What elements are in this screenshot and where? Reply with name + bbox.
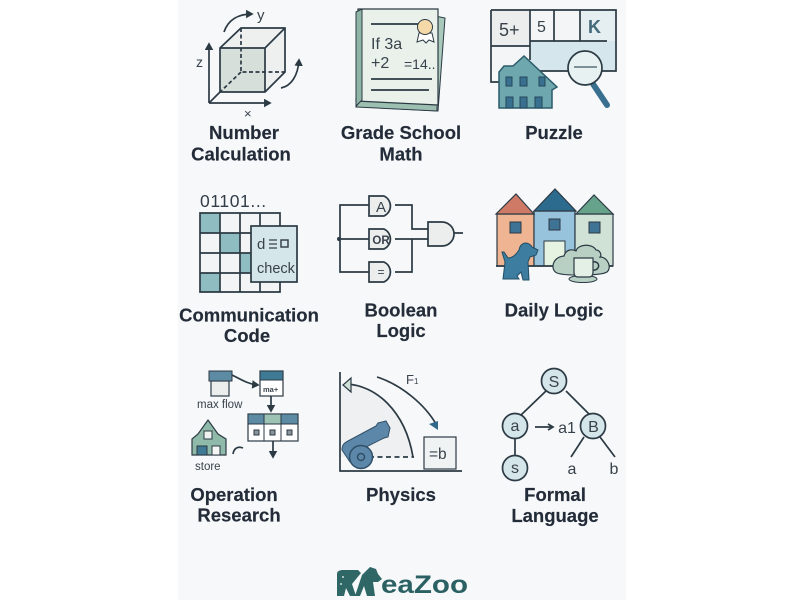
heading: number calculation: Calculation <box>191 144 291 164</box>
icon: 3D cube with axes: y <box>257 7 265 24</box>
heading: operation research: Operation <box>190 484 278 505</box>
icon: code grid with check card: check <box>257 261 296 277</box>
icon: houses, dog and cup <box>496 189 613 282</box>
icon: parse tree: b <box>610 461 619 478</box>
icon: puzzle grid with house and magnifier: 5+ <box>499 20 520 40</box>
icon: cannon trajectory <box>340 372 462 471</box>
icon: parse tree: a <box>511 418 520 435</box>
panel: number calculation <box>191 7 299 164</box>
icon: dog <box>502 243 538 280</box>
icon: operations flow diagram: max flow <box>197 399 243 411</box>
heading: operation research: Research <box>197 504 281 526</box>
icon: 3D cube with axes <box>196 7 299 121</box>
panel: operation research <box>190 371 298 526</box>
icon: puzzle grid with house and magnifier: 5 <box>537 19 546 36</box>
heading: physics: Physics <box>366 484 436 505</box>
heading: grade school math: Grade School <box>341 122 461 143</box>
icon: parse tree: a <box>568 461 577 478</box>
icon: operations flow diagram: ma+ <box>263 385 279 394</box>
icon: parse tree: B <box>588 419 599 436</box>
icon: parse tree: s <box>511 460 519 477</box>
icon: operations flow diagram: store <box>195 461 221 473</box>
panel: grade school math <box>341 9 461 164</box>
icon: store barn <box>192 420 226 455</box>
icon: logic gates circuit: = <box>377 265 385 279</box>
icon: math workbook: If 3a <box>371 36 402 53</box>
icon: 3D cube with axes: z <box>196 54 203 70</box>
heading: boolean logic: Logic <box>376 320 426 341</box>
icon: 3D cube with axes: × <box>244 106 252 121</box>
heading: boolean logic: Boolean <box>365 300 437 320</box>
icon: cannon trajectory: F1 <box>406 372 419 387</box>
icon: code grid with check card: 01101... <box>200 191 267 211</box>
heading: daily logic: Daily Logic <box>505 300 603 320</box>
heading: communication code: Code <box>224 325 270 346</box>
icon: math workbook: +2 <box>371 55 389 72</box>
icon: bear logo <box>337 567 382 596</box>
heading: number calculation: Number <box>209 122 279 143</box>
icon: operations flow diagram <box>192 371 298 473</box>
icon: bush and coffee cup <box>553 245 609 282</box>
heading: formal language: Formal <box>524 484 586 505</box>
icon: logic gates circuit: OR <box>372 235 390 247</box>
icon: logic gates circuit <box>337 196 463 282</box>
icon: cannon trajectory: =b <box>429 446 447 463</box>
heading: communication code: Communication <box>179 304 319 326</box>
icon: award ribbon <box>417 20 434 43</box>
icon: code grid with check card: d <box>257 236 265 253</box>
panel: physics <box>340 372 462 505</box>
icon: magnifying glass <box>568 51 607 105</box>
icon: parse tree: a1 <box>558 420 576 437</box>
panel: boolean logic <box>337 196 463 341</box>
icon: house <box>499 56 557 108</box>
icon: logic gates circuit: A <box>376 199 386 216</box>
heading: grade school math: Math <box>379 144 423 164</box>
logo <box>337 567 468 599</box>
heading: puzzle: Puzzle <box>525 122 583 143</box>
background panel <box>178 0 626 600</box>
icon: math workbook: =14.. <box>404 56 436 72</box>
icon: parse tree: S <box>549 374 559 391</box>
icon: parse tree <box>502 368 619 480</box>
panel: puzzle <box>491 10 616 143</box>
icon: code grid with check card <box>200 191 297 292</box>
panel: formal language <box>502 368 619 526</box>
heading: formal language: Language <box>511 505 599 526</box>
wordmark: eaZoo <box>381 571 468 599</box>
icon: puzzle grid with house and magnifier <box>491 10 616 108</box>
panel: daily logic <box>496 189 613 320</box>
icon: math workbook <box>356 9 445 111</box>
panel: communication code <box>179 191 319 346</box>
icon: puzzle grid with house and magnifier: K <box>588 17 601 37</box>
